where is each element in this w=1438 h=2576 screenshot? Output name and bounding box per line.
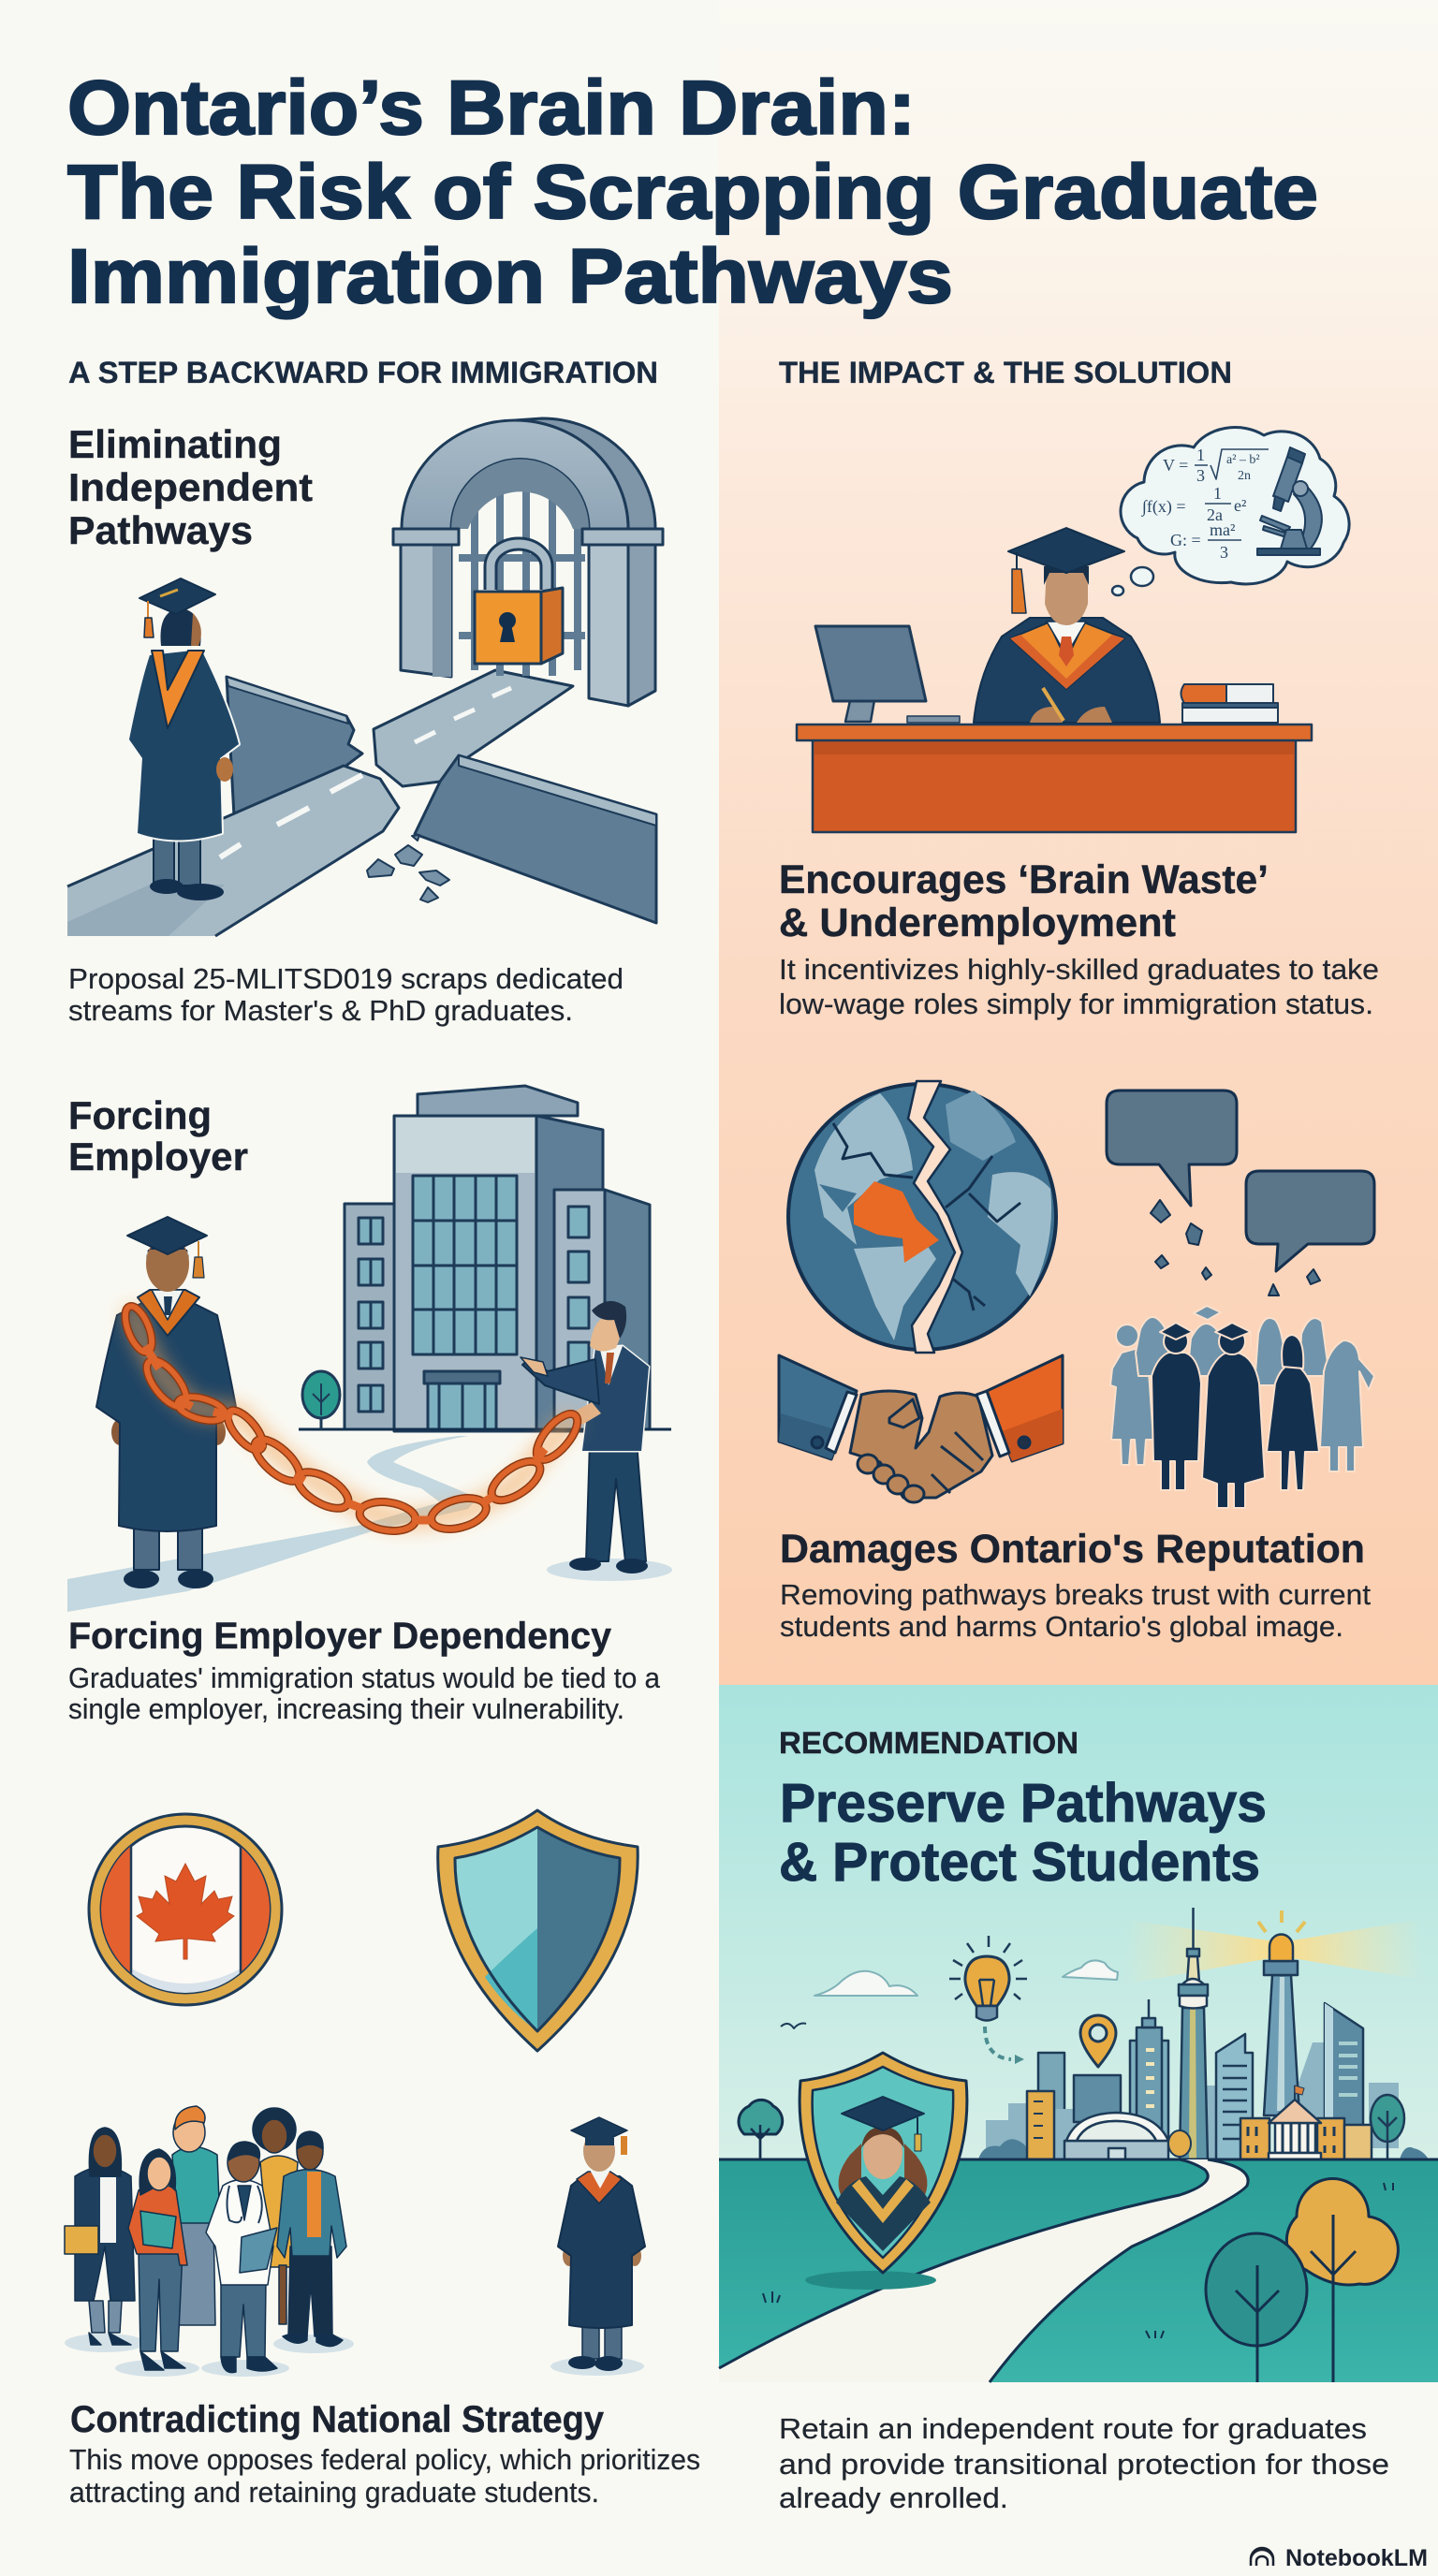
right wall: [415, 755, 656, 923]
ground and road: [719, 2159, 1438, 2382]
title: Ontario’s Brain Drain:: [67, 66, 916, 151]
back man in teal: [176, 2218, 215, 2325]
text: damages reputation: [780, 1527, 1371, 1643]
section heading: right: THE IMPACT & THE SOLUTION: [779, 356, 1232, 389]
grass tufts: [763, 2183, 1393, 2338]
text: encourages brain waste: Encourages ‘Brain Waste’: [779, 857, 1269, 902]
text: contradicting national strategy: attracting and retaining graduate students.: [69, 2476, 599, 2509]
desk: [813, 740, 1296, 832]
arch back depth: [515, 418, 655, 529]
panel: a step backward for immigration: [65, 356, 700, 2509]
illustration: broken road and locked gate: [67, 418, 663, 936]
brand mark: NotebookLM: NotebookLM: [1285, 2545, 1428, 2571]
icon: padlock: [475, 544, 563, 664]
illustration: lone graduate: [550, 2117, 645, 2376]
title: Immigration Pathways: [67, 234, 953, 319]
text: forcing employer dependency: Graduates' immigration status would be tied to a: [68, 1661, 661, 1694]
left wall: [227, 677, 362, 816]
text: damages reputation: Damages Ontario's Reputation: [780, 1527, 1365, 1572]
orange chain: [120, 1303, 584, 1534]
section heading: left: A STEP BACKWARD FOR IMMIGRATION: [68, 356, 658, 389]
heading: eliminating independent pathways: Independent: [68, 465, 313, 509]
speech bubbles and falling fragments: [1107, 1090, 1374, 1295]
heading: forcing employer: Forcing: [68, 1093, 212, 1137]
text: encourages brain waste: It incentivizes highly-skilled graduates to take: [779, 953, 1379, 986]
rubble: [367, 835, 449, 902]
graduate at desk: [974, 528, 1160, 723]
heading: forcing employer: [68, 1093, 248, 1178]
books: [1181, 684, 1278, 723]
ontario shape: [854, 1181, 939, 1263]
office building: [345, 1086, 650, 1431]
recommendation heading: Preserve Pathways: [780, 1773, 1267, 1834]
thought cloud: ∫f(x) =: [1141, 497, 1186, 517]
thought cloud: V =: [1163, 456, 1188, 475]
lighthouse: [1264, 1975, 1299, 2115]
thought cloud: 3: [1196, 466, 1205, 485]
thought cloud: G: =: [1170, 531, 1201, 549]
thought cloud: 1: [1213, 484, 1222, 503]
text: encourages brain waste: [779, 857, 1379, 1020]
recommendation heading: & Protect Students: [779, 1832, 1260, 1893]
ground line: [299, 1428, 671, 1430]
text: damages reputation: Removing pathways breaks trust with current: [780, 1578, 1371, 1611]
heading: eliminating independent pathways: [68, 422, 313, 552]
illustration: broken handshake: [779, 1355, 1063, 1502]
heading: eliminating independent pathways: Pathways: [68, 508, 253, 552]
panel: recommendation: [719, 1726, 1438, 2514]
legislature: [1240, 2118, 1269, 2159]
trees: [739, 2100, 1398, 2382]
body text: proposal: [68, 962, 624, 1027]
icon: microscope: [1257, 447, 1322, 555]
window grid: [413, 1176, 517, 1354]
path on ground: [67, 1436, 477, 1612]
thought cloud: 2a: [1207, 505, 1223, 524]
text: forcing employer dependency: Forcing Employer Dependency: [68, 1616, 612, 1657]
skyline: [978, 1908, 1429, 2159]
body text: recommendation: [779, 2412, 1389, 2514]
doctor: [221, 2282, 266, 2357]
illustration: group of diverse professionals: [65, 2106, 354, 2377]
icon: shield: [438, 1810, 638, 2051]
bird: [781, 2024, 806, 2028]
text: contradicting national strategy: This move opposes federal policy, which prioritizes: [69, 2443, 700, 2476]
cn tower: [1180, 2008, 1208, 2159]
tree: [320, 1399, 322, 1429]
stadium dome: [1064, 2141, 1168, 2159]
thought cloud: 1: [1196, 446, 1205, 464]
woman with folder: [75, 2167, 135, 2301]
recommendation heading: [779, 1773, 1267, 1893]
heading: eliminating independent pathways: Eliminating: [68, 422, 282, 466]
text: forcing employer dependency: [68, 1616, 661, 1725]
thought cloud: ma²: [1210, 520, 1235, 539]
foreground graduates: [1152, 1323, 1319, 1508]
body text: recommendation: already enrolled.: [779, 2481, 1008, 2514]
illustration: protected path to toronto skyline: [719, 1908, 1438, 2382]
text: contradicting national strategy: [69, 2399, 700, 2509]
text: forcing employer dependency: single employer, increasing their vulnerability.: [68, 1692, 624, 1725]
text: encourages brain waste: & Underemployment: [779, 900, 1176, 945]
thought cloud: 3: [1220, 543, 1228, 562]
cracks: [833, 1123, 1020, 1310]
illustration: cracked globe with Ontario: [788, 1081, 1056, 1353]
thought cloud: e²: [1234, 496, 1246, 515]
gate bars: [459, 485, 585, 676]
icon: canadian flag medallion: [89, 1814, 283, 2005]
text: encourages brain waste: low-wage roles simply for immigration status.: [779, 988, 1373, 1020]
land masses: [814, 1093, 913, 1245]
arch pillars: [401, 545, 451, 677]
body text: proposal: streams for Master's & PhD graduates.: [68, 994, 573, 1027]
text: contradicting national strategy: Contradicting National Strategy: [70, 2399, 605, 2440]
body text: proposal: Proposal 25-MLITSD019 scraps dedicated: [68, 962, 624, 995]
woman in orange: [139, 2251, 183, 2351]
arch ring: [402, 420, 628, 529]
illustration: overqualified graduate at desk: [797, 428, 1349, 832]
lighthouse beams: [1123, 1919, 1281, 1984]
shield with graduate: [800, 2053, 967, 2290]
thought cloud: 2n: [1238, 469, 1251, 483]
clouds: [814, 1971, 917, 1996]
back woman in yellow: [260, 2156, 298, 2267]
graduate from behind: [129, 578, 239, 900]
illustration: graduate chained to employer: [67, 1086, 672, 1612]
recommendation label: RECOMMENDATION: [779, 1726, 1078, 1760]
heading: forcing employer: Employer: [68, 1134, 248, 1178]
thought cloud: [1112, 428, 1349, 595]
crowd of silhouettes: [1110, 1306, 1374, 1508]
panel: the impact and the solution: [779, 356, 1379, 1643]
thought cloud: a² – b²: [1226, 453, 1260, 467]
far road: [374, 670, 573, 786]
title: The Risk of Scrapping Graduate: [67, 150, 1318, 235]
text: damages reputation: students and harms Ontario's global image.: [780, 1610, 1343, 1643]
skyline tree: [1400, 2147, 1429, 2159]
icon: location pin: [1080, 2015, 1116, 2067]
title: [67, 66, 1318, 319]
man in teal jacket: [288, 2247, 332, 2336]
near road: [67, 766, 399, 936]
body text: recommendation: Retain an independent route for graduates: [779, 2412, 1367, 2445]
icon: light bulb: [949, 1936, 1027, 2064]
background crowd: [1110, 1306, 1374, 1471]
graduate facing viewer: [96, 1217, 236, 1588]
body text: recommendation: and provide transitional protection for those: [779, 2448, 1389, 2481]
businessman: [521, 1301, 672, 1581]
globe fracture gap: [908, 1081, 962, 1353]
monitor: [845, 671, 879, 722]
